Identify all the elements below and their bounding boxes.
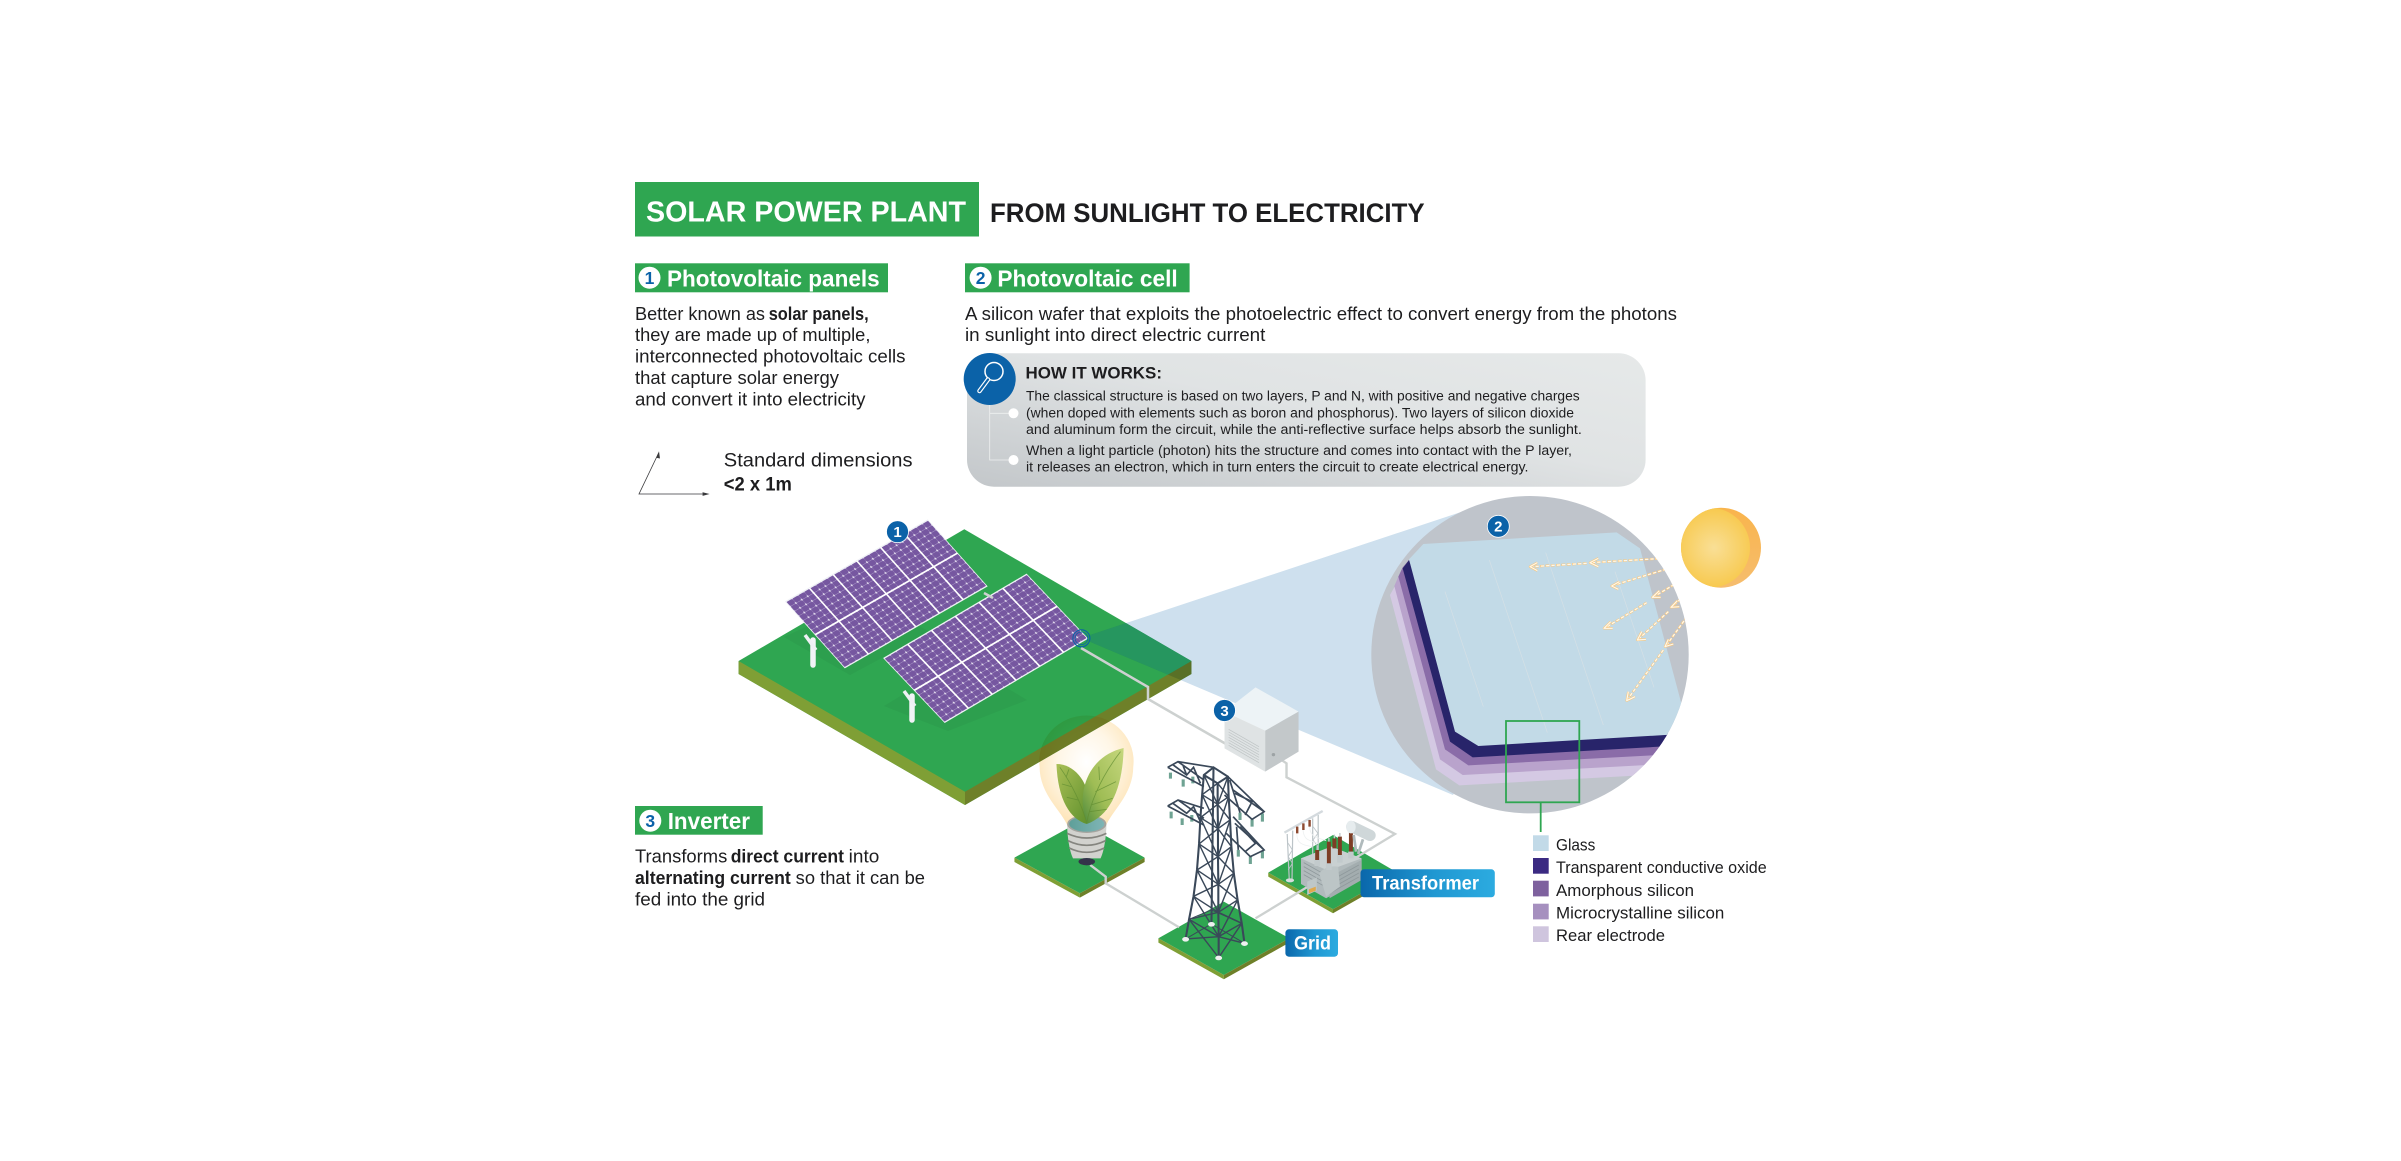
detail box and leader [1506, 721, 1579, 832]
heading: photovoltaic panels: 1 [645, 268, 655, 288]
cable: panels to inverter [984, 593, 1226, 744]
text: how it works body [1026, 389, 1582, 475]
text: inverter description: into [849, 847, 879, 867]
subtitle: FROM SUNLIGHT TO ELECTRICITY [990, 198, 1425, 228]
text: photovoltaic cell description: in sunlight into direct electric current [965, 325, 1265, 345]
heading: photovoltaic cell: 2 [976, 268, 986, 288]
legend: glass [1533, 835, 1595, 855]
heading: inverter: 3 [645, 811, 655, 831]
leaves [1056, 748, 1124, 824]
cables: inverter, transformer and bulb to grid [1090, 755, 1395, 927]
inverter box [1225, 687, 1299, 772]
text: how it works body: The classical structure is based on two layers, P and N, with positive and negative charges [1026, 389, 1580, 404]
number badge 2 [1487, 515, 1509, 537]
text: photovoltaic panels description: interconnected photovoltaic cells [635, 347, 906, 367]
tag: transformer [1360, 869, 1495, 897]
layer: glass [1409, 532, 1687, 746]
text: how it works body: When a light particle (photon) hits the structure and comes into contact with the P layer, [1026, 443, 1572, 458]
heading: inverter [635, 806, 763, 835]
icon: sun [1681, 508, 1761, 588]
panel: how it works [964, 353, 1646, 487]
magnified cell lens [1371, 496, 1703, 813]
solar array 1 [786, 520, 987, 668]
bulb socket [1067, 815, 1106, 865]
tower feet [1182, 922, 1248, 960]
platform: transformer [1268, 835, 1397, 913]
glass streaks [1445, 553, 1654, 733]
tower legs [1186, 767, 1244, 958]
text: inverter description: fed into the grid [635, 889, 765, 909]
legend: glass: Glass [1556, 837, 1595, 855]
text: how it works body: it releases an electron, which in turn enters the circuit to create electrical energy. [1026, 460, 1528, 475]
transformer equipment [1284, 811, 1370, 898]
gantry [1284, 811, 1326, 882]
heading: photovoltaic panels: Photovoltaic panels [667, 266, 880, 292]
layer: microcrystalline silicon [1394, 576, 1666, 775]
number badge 3 [1214, 700, 1236, 722]
text: photovoltaic panels description [635, 304, 906, 410]
transmission tower [1168, 762, 1264, 960]
number badge 2: 2 [1494, 519, 1502, 536]
text: standard dimensions: Standard dimensions [724, 451, 912, 472]
heading: inverter: Inverter [668, 808, 750, 834]
number badge 3: 3 [1220, 703, 1229, 720]
text: inverter description: alternating current [635, 868, 791, 888]
bushings [1317, 830, 1351, 870]
text: how it works body: and aluminum form the circuit, while the anti-reflective surface helps absorb the sunlight. [1026, 422, 1582, 437]
legend: rear electrode: Rear electrode [1556, 927, 1665, 945]
heading: photovoltaic cell: Photovoltaic cell [997, 266, 1178, 292]
text: photovoltaic cell description [965, 304, 1677, 345]
text: inverter description [635, 847, 925, 909]
text: inverter description: so that it can be [796, 868, 925, 888]
transformer tank [1301, 847, 1362, 898]
icon: magnifier [964, 353, 1016, 405]
layer: transparent conductive oxide [1403, 560, 1677, 757]
text: photovoltaic panels description: and convert it into electricity [635, 390, 866, 410]
connector: bullet dots [990, 405, 1018, 465]
layer: amorphous silicon [1398, 560, 1677, 765]
cross arms [1168, 762, 1264, 857]
text: standard dimensions: <2 x 1m [724, 475, 792, 496]
number badge 1: 1 [893, 524, 902, 541]
scene: grid and inverter illustrations [1014, 687, 1397, 979]
callout ring on panel corner [1073, 630, 1090, 647]
legend: transparent conductive oxide: Transparent conductive oxide [1556, 859, 1767, 877]
arrows: sunlight [1530, 558, 1703, 701]
title banner: SOLAR POWER PLANT [646, 197, 966, 229]
light bulb with leaves [1039, 715, 1134, 865]
text: inverter description: direct current [731, 847, 844, 867]
solar array 2 [884, 574, 1087, 722]
cell layers [1390, 532, 1703, 785]
control box [1307, 877, 1317, 895]
legend [1533, 835, 1767, 945]
platform: bulb [1014, 822, 1145, 898]
magnification cone [1086, 512, 1460, 795]
text: standard dimensions [724, 451, 912, 496]
insulators [1170, 773, 1262, 864]
number badge 1 [886, 521, 908, 543]
heading: how it works: HOW IT WORKS: [1026, 364, 1162, 382]
icon: dimension arrows [639, 453, 708, 495]
text: photovoltaic panels description: solar panels, [769, 304, 869, 324]
text: inverter description: Transforms [635, 847, 727, 867]
legend: microcrystalline silicon: Microcrystalline silicon [1556, 905, 1724, 923]
text: photovoltaic panels description: Better known as [635, 304, 765, 324]
text: photovoltaic cell description: A silicon wafer that exploits the photoelectric effect to convert energy from the photons [965, 304, 1677, 324]
legend: amorphous silicon: Amorphous silicon [1556, 882, 1694, 900]
layer: rear electrode [1390, 587, 1644, 786]
text: how it works body: (when doped with elements such as boron and phosphorus). Two layers of silicon dioxide [1026, 405, 1574, 420]
tag: transformer: Transformer [1372, 874, 1480, 895]
platform: grid [1158, 902, 1289, 979]
text: photovoltaic panels description: that capture solar energy [635, 368, 839, 388]
tag: grid: Grid [1294, 934, 1331, 955]
platform: solar field [739, 529, 1191, 805]
conservator tank [1346, 821, 1370, 854]
tag: grid [1285, 929, 1338, 957]
title banner [635, 182, 979, 236]
text: photovoltaic panels description: they are made up of multiple, [635, 325, 870, 345]
tower lattice [1189, 795, 1242, 937]
